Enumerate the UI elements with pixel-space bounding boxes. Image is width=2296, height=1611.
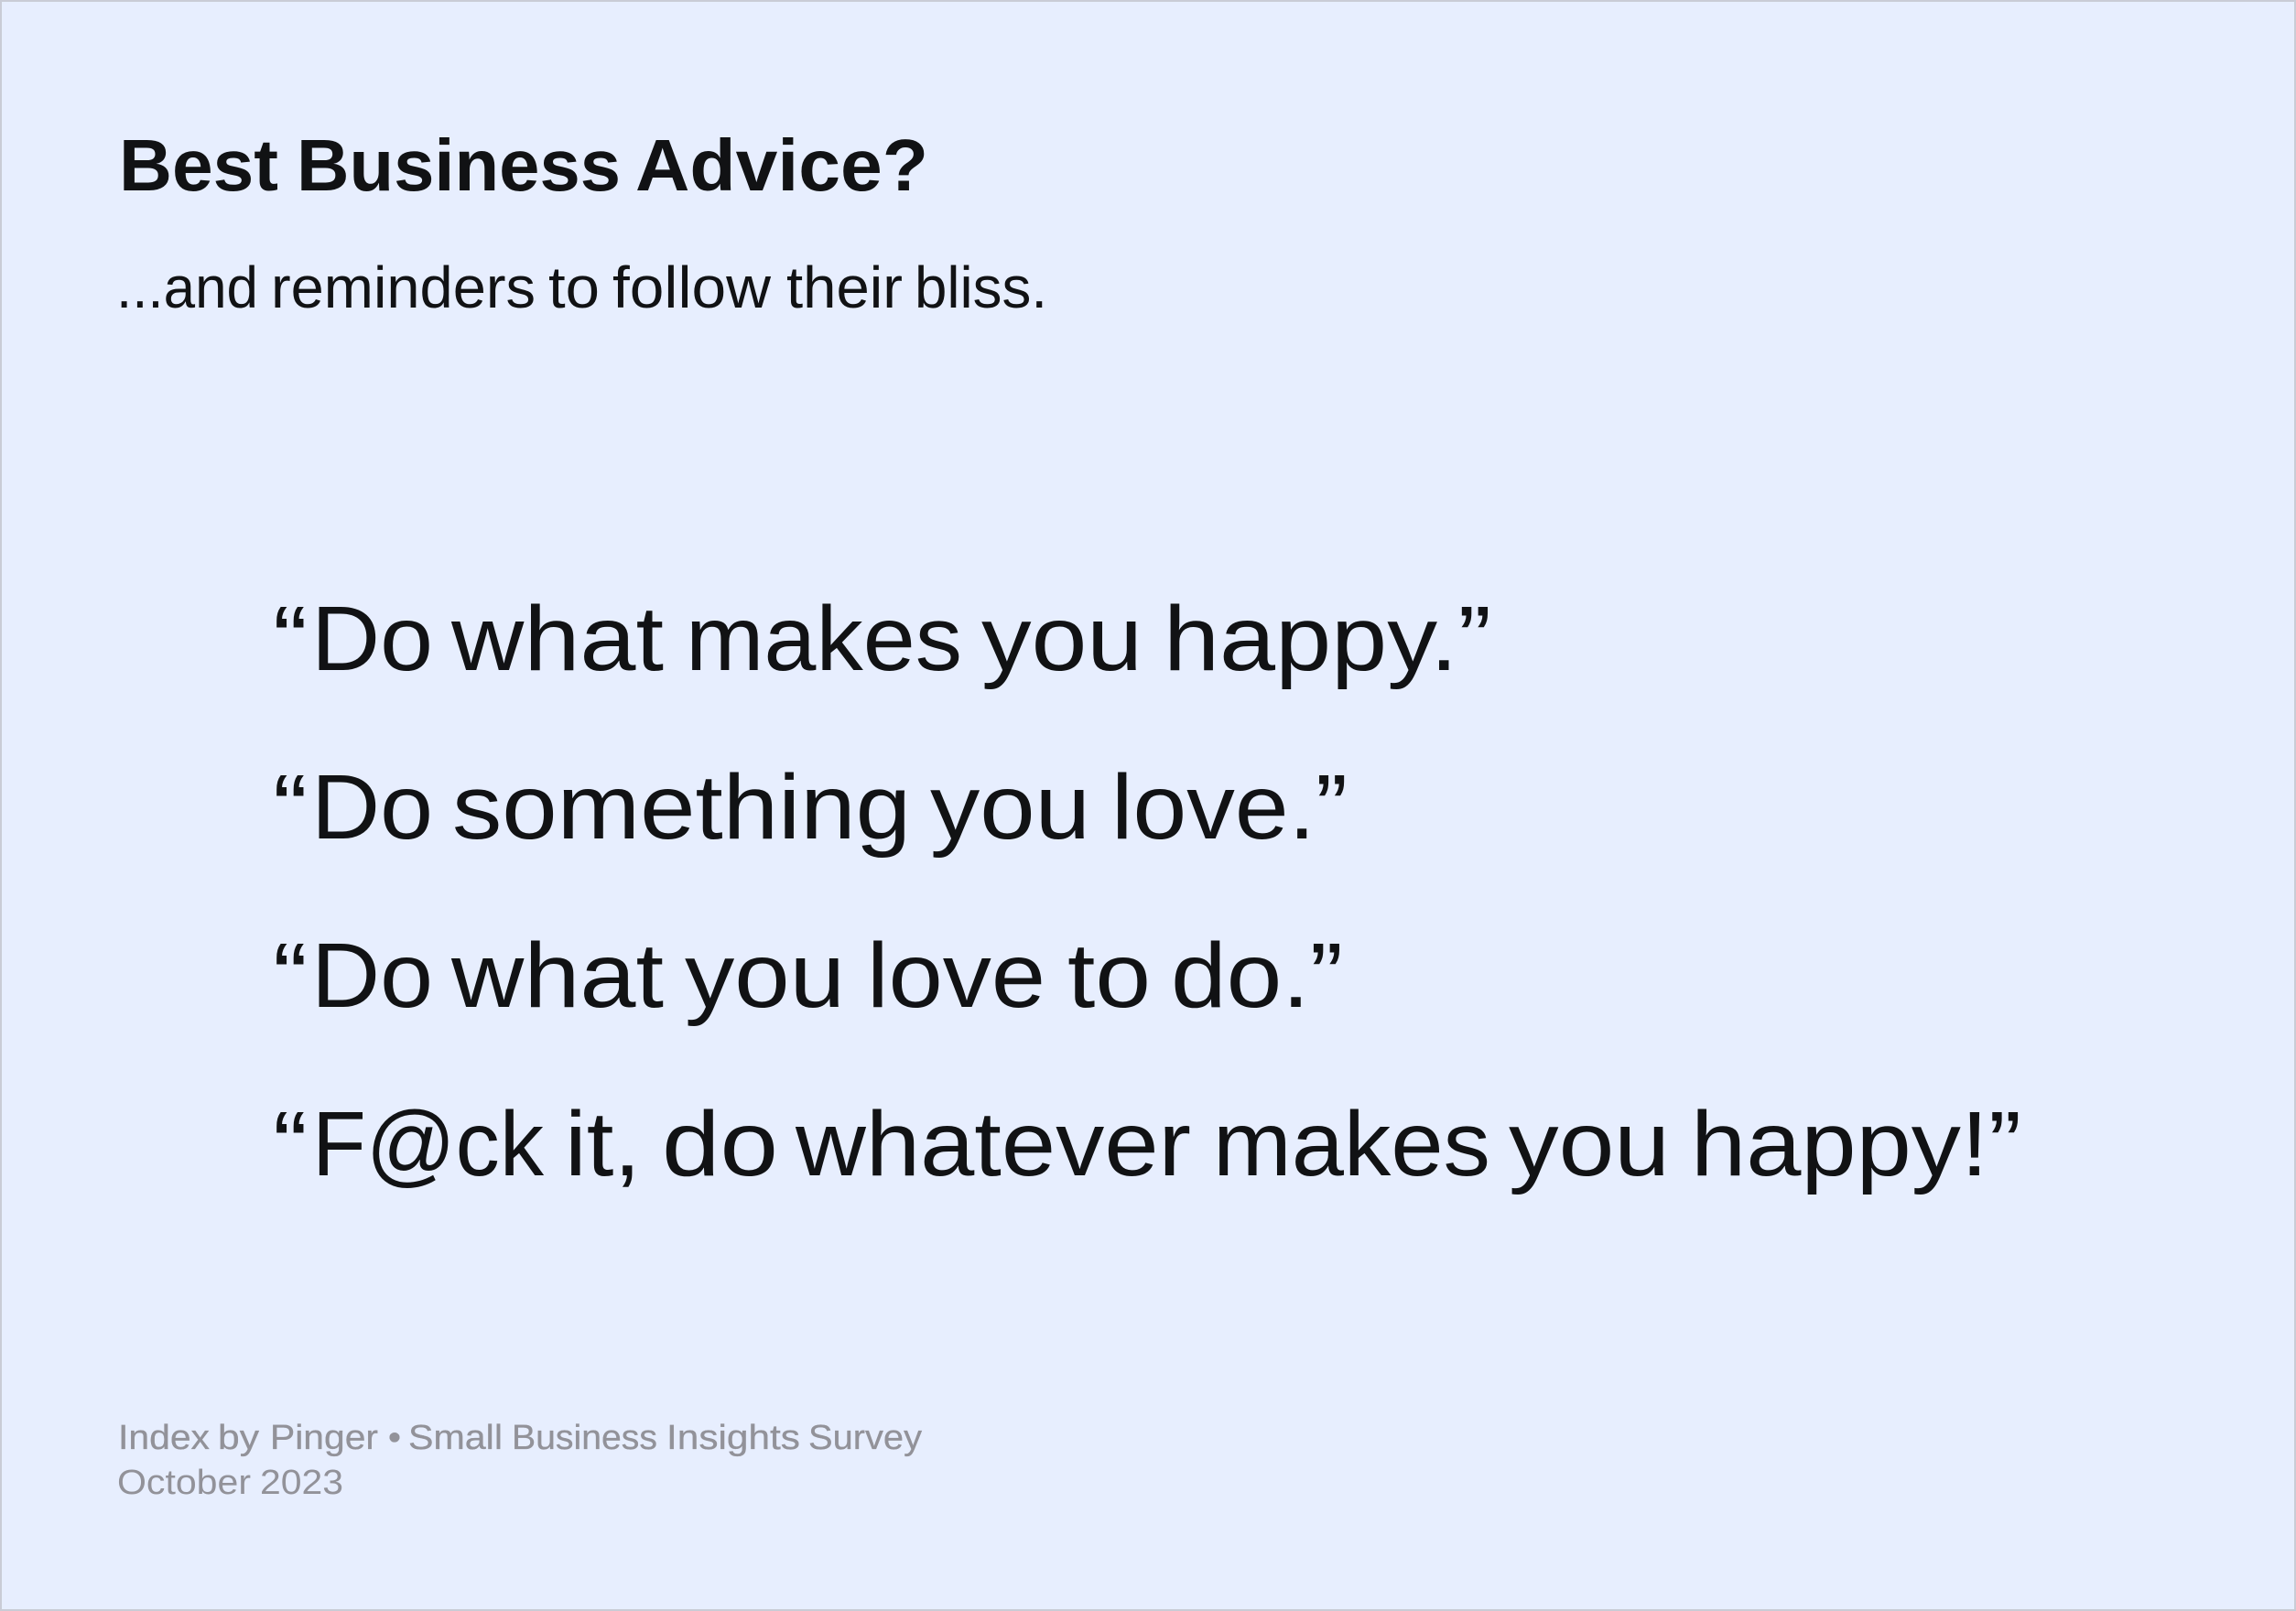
subtitle: their xyxy=(786,254,903,320)
quote 4: whatever xyxy=(795,1093,1191,1195)
subtitle: ...and xyxy=(116,254,258,320)
quote 3: you xyxy=(685,924,845,1027)
source line: by xyxy=(218,1419,259,1457)
quote 1: makes xyxy=(686,588,962,690)
quote 2: Do xyxy=(311,756,433,859)
quote 1: “ xyxy=(273,588,308,690)
quote 2: love.” xyxy=(1111,756,1348,859)
title: Business xyxy=(297,124,621,206)
quote 4: happy!” xyxy=(1691,1093,2021,1195)
date line: 2023 xyxy=(260,1464,343,1502)
quote 2: “ xyxy=(273,756,308,859)
quote 3: to xyxy=(1067,924,1151,1027)
quote 1: you xyxy=(981,588,1143,690)
quote 1: what xyxy=(450,588,664,690)
date line: October xyxy=(117,1464,251,1502)
quotes block xyxy=(273,588,2021,1195)
source line: Pinger xyxy=(270,1419,378,1457)
footer source xyxy=(117,1419,922,1502)
quote 3: love xyxy=(867,924,1045,1027)
source line: Business xyxy=(512,1419,657,1457)
subtitle: to xyxy=(548,254,600,320)
quote 3: “ xyxy=(273,924,308,1027)
quote 4: makes xyxy=(1213,1093,1490,1195)
source line: Insights xyxy=(666,1419,800,1457)
title: Advice? xyxy=(635,124,928,206)
quote 1: Do xyxy=(311,588,433,690)
quote 3: what xyxy=(450,924,664,1027)
quote 2: you xyxy=(930,756,1090,859)
quote 4: “ xyxy=(273,1093,308,1195)
title: Best xyxy=(119,124,278,206)
quote 4: do xyxy=(662,1093,778,1195)
quote 4: you xyxy=(1509,1093,1670,1195)
subtitle: reminders xyxy=(271,254,536,320)
source line: Small xyxy=(408,1419,503,1457)
quote 3: do.” xyxy=(1171,924,1343,1027)
quote 4: it, xyxy=(565,1093,641,1195)
source line: • xyxy=(388,1419,401,1457)
source line: Survey xyxy=(808,1419,922,1457)
quote 1: happy.” xyxy=(1164,588,1491,690)
quote 2: something xyxy=(452,756,911,859)
quote 3: Do xyxy=(311,924,433,1027)
quote 4: F@ck xyxy=(312,1093,545,1195)
subtitle: follow xyxy=(612,254,772,320)
source line: Index xyxy=(118,1419,210,1457)
subtitle: bliss. xyxy=(915,254,1047,320)
